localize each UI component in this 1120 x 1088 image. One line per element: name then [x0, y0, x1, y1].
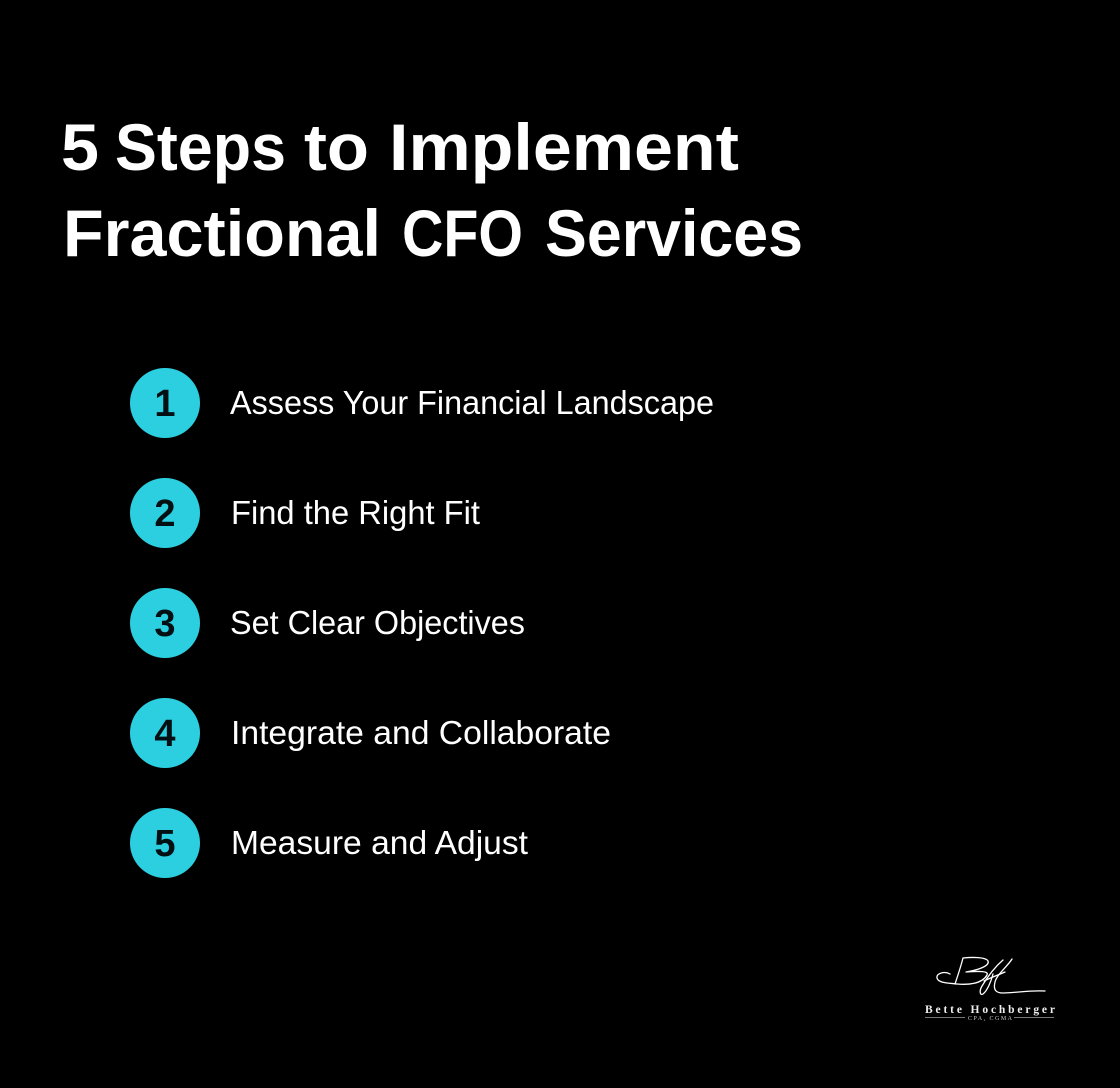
step 3: Set Clear Objectives [230, 605, 525, 642]
title: 5 [61, 110, 99, 184]
step 4: Integrate and Collaborate [231, 715, 611, 752]
step 5: 5 [154, 823, 176, 865]
title: Services [545, 196, 803, 270]
step 2: 2 [154, 493, 176, 535]
logo divider left [925, 1017, 965, 1018]
title: CFO [402, 196, 523, 270]
logo credentials: CPA, CGMA [968, 1016, 1013, 1022]
step 1: 1 [154, 383, 176, 425]
title: Implement [389, 110, 739, 184]
step 3 [130, 588, 525, 658]
step 4 [130, 698, 611, 768]
step 2: Find the Right Fit [231, 495, 481, 532]
step 5 [130, 808, 529, 878]
step 3: 3 [154, 603, 176, 645]
title [61, 110, 803, 270]
logo name: Bette Hochberger [925, 1004, 1055, 1016]
title: to [304, 110, 369, 184]
title: Steps [115, 110, 286, 184]
logo: Bette Hochberger signature [925, 957, 1055, 1022]
step 1 [130, 368, 714, 438]
logo divider right [1014, 1017, 1054, 1018]
title: Fractional [63, 196, 381, 270]
step 2 [130, 478, 481, 548]
step 1: Assess Your Financial Landscape [230, 385, 714, 422]
step 5: Measure and Adjust [231, 825, 529, 862]
icon: BH signature mark [937, 957, 1045, 994]
step 4: 4 [154, 713, 176, 755]
